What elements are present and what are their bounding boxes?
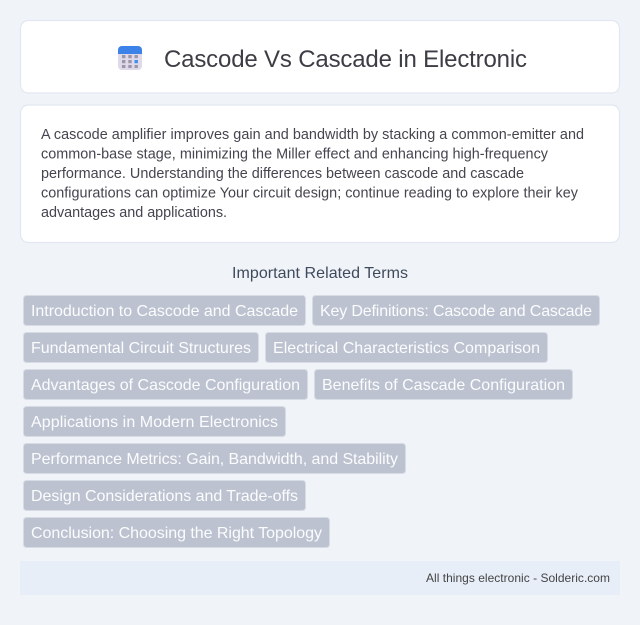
icon: calendar — [118, 46, 142, 70]
tag — [24, 480, 306, 510]
intro text panel — [20, 105, 620, 242]
tag — [314, 370, 572, 400]
intro text panel: advantages and applications. — [41, 205, 227, 221]
tag: Advantages of Cascode Configuration — [31, 377, 300, 394]
footer: All things electronic - Solderic.com — [426, 571, 610, 585]
tag — [266, 332, 548, 362]
footer — [20, 561, 620, 595]
heading: important related terms: Important Related Terms — [232, 265, 408, 282]
tag — [24, 370, 308, 400]
tag: Benefits of Cascade Configuration — [322, 377, 565, 394]
intro text panel: performance. Understanding the differences between cascode and cascade — [41, 166, 524, 182]
tag — [24, 296, 306, 326]
tag — [24, 444, 406, 474]
tag — [24, 518, 330, 548]
tag: Introduction to Cascode and Cascade — [31, 303, 298, 320]
header card — [20, 20, 620, 93]
tag list — [24, 296, 600, 548]
tag — [312, 296, 600, 326]
tag: Performance Metrics: Gain, Bandwidth, and Stability — [31, 451, 398, 468]
tag: Conclusion: Choosing the Right Topology — [31, 525, 322, 542]
tag: Applications in Modern Electronics — [31, 414, 278, 431]
title: Cascode Vs Cascade in Electronic — [164, 46, 527, 73]
tag: Fundamental Circuit Structures — [31, 340, 251, 357]
intro text panel: common-base stage, minimizing the Miller effect and enhancing high-frequency — [41, 146, 549, 162]
tag — [24, 406, 286, 436]
intro text panel: configurations can optimize Your circuit design; continue reading to explore their key — [41, 186, 579, 202]
tag — [24, 332, 258, 362]
tag: Key Definitions: Cascode and Cascade — [320, 303, 592, 320]
tag: Design Considerations and Trade-offs — [31, 488, 298, 505]
intro text panel: A cascode amplifier improves gain and bandwidth by stacking a common-emitter and — [41, 127, 584, 143]
tag: Electrical Characteristics Comparison — [273, 340, 540, 357]
